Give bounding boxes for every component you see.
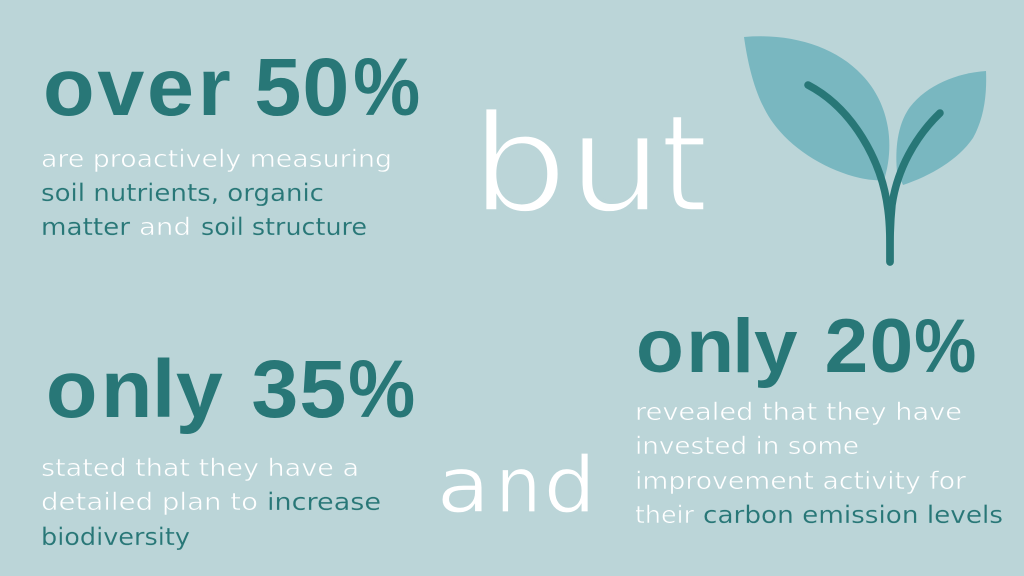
left leaf bbox=[744, 36, 889, 181]
text block: carbon emission description bbox=[635, 398, 1003, 529]
text block: carbon emission description: their bbox=[635, 501, 694, 529]
text block: carbon emission description: invested in some bbox=[635, 432, 859, 460]
heading: only 35%: 35 bbox=[251, 343, 346, 435]
heading: only 35%: % bbox=[348, 343, 415, 435]
text block: carbon emission description: revealed that they have bbox=[635, 398, 962, 426]
connector word: but bbox=[470, 84, 708, 244]
text block: carbon emission description: improvement activity for bbox=[635, 467, 966, 495]
heading: over 50% bbox=[43, 41, 420, 133]
heading: only 20%: % bbox=[914, 304, 976, 389]
stem bbox=[808, 85, 890, 262]
text block: biodiversity description: detailed plan to bbox=[41, 488, 258, 516]
text block: biodiversity description bbox=[41, 454, 381, 551]
heading: only 20%: 20 bbox=[825, 304, 913, 389]
heading: only 35% bbox=[46, 343, 415, 435]
connector word: and: d bbox=[544, 440, 596, 531]
text block: carbon emission description: carbon emission levels bbox=[703, 501, 1003, 529]
text block: soil measuring description: soil nutrients, organic bbox=[41, 179, 324, 207]
connector word: and: a bbox=[437, 439, 490, 531]
heading: over 50%: over bbox=[43, 41, 231, 133]
text block: soil measuring description: and bbox=[139, 213, 191, 241]
text block: soil measuring description: matter bbox=[41, 213, 130, 241]
icon: sprouting plant bbox=[744, 36, 986, 262]
connector word: but: u bbox=[568, 84, 663, 243]
text block: soil measuring description bbox=[41, 145, 392, 241]
connector word: and bbox=[437, 439, 596, 531]
text block: soil measuring description: are proactively measuring bbox=[41, 145, 392, 173]
right leaf bbox=[896, 71, 986, 185]
heading: only 20%: only bbox=[636, 304, 798, 389]
text block: biodiversity description: biodiversity bbox=[41, 523, 190, 551]
heading: over 50%: 50 bbox=[254, 41, 349, 133]
connector word: but: b bbox=[470, 85, 568, 244]
text block: biodiversity description: increase bbox=[267, 488, 381, 516]
panel: carbon emission statistic bbox=[635, 304, 1003, 529]
text block: soil measuring description: soil structure bbox=[201, 213, 367, 241]
connector word: but: t bbox=[661, 86, 708, 244]
heading: over 50%: % bbox=[353, 41, 420, 133]
heading: only 35%: only bbox=[46, 343, 223, 435]
panel: soil measuring statistic bbox=[41, 41, 420, 241]
heading: only 20% bbox=[636, 304, 976, 389]
text block: biodiversity description: stated that they have a bbox=[41, 454, 359, 482]
panel: biodiversity statistic bbox=[41, 343, 415, 551]
connector word: and: n bbox=[496, 439, 541, 531]
